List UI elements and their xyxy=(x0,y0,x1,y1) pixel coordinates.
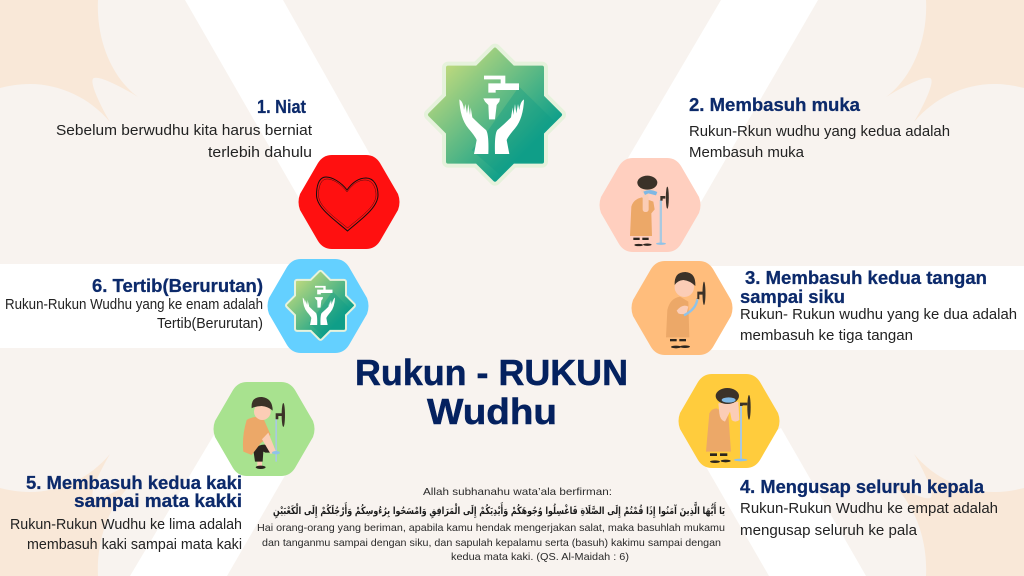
text: membasuh muka: Rukun-Rkun wudhu yang kedua adalah xyxy=(689,124,950,140)
text: tertib: Rukun-Rukun Wudhu yang ke enam adalah xyxy=(5,297,263,313)
text: membasuh tangan: Rukun- Rukun wudhu yang ke dua adalah xyxy=(740,307,1017,323)
heading: membasuh tangan xyxy=(740,268,987,307)
quran verse block xyxy=(257,486,725,563)
text: membasuh muka: Membasuh muka xyxy=(689,145,805,161)
heading: membasuh muka: 2. Membasuh muka xyxy=(689,95,861,115)
text: mengusap kepala: Rukun-Rukun Wudhu ke empat adalah xyxy=(740,501,998,517)
text: membasuh kaki: membasuh kaki sampai mata kaki xyxy=(27,537,242,553)
text: mengusap kepala xyxy=(740,501,998,539)
heading: niat: 1. Niat xyxy=(257,97,306,117)
text: niat xyxy=(56,123,312,161)
heading: membasuh tangan: sampai siku xyxy=(740,287,845,307)
step 2: membasuh muka xyxy=(600,95,950,252)
text: membasuh tangan xyxy=(740,307,1017,344)
icon: pink hexagon washing face xyxy=(600,158,700,252)
heading: membasuh kaki: sampai mata kakki xyxy=(74,491,242,511)
verse translation xyxy=(257,522,725,563)
heading: mengusap kepala: 4. Mengusap seluruh kepala xyxy=(740,477,985,497)
step 3: membasuh tangan xyxy=(632,261,1017,355)
verse translation: Hai orang-orang yang beriman, apabila kamu hendak mengerjakan salat, maka basuhlah mukamu xyxy=(257,522,725,534)
step 6: tertib xyxy=(5,259,368,353)
heading: membasuh kaki: 5. Membasuh kedua kaki xyxy=(26,473,242,493)
icon: orange hexagon washing arms xyxy=(632,261,732,355)
step 1: niat xyxy=(56,97,400,249)
title: Wudhu xyxy=(427,391,557,432)
icon: yellow hexagon wiping head xyxy=(678,374,780,468)
step 4: mengusap kepala xyxy=(678,374,998,539)
step 5: membasuh kaki xyxy=(10,382,314,553)
text: membasuh kaki: Rukun-Rukun Wudhu ke lima adalah xyxy=(10,517,242,533)
heading: tertib: 6. Tertib(Berurutan) xyxy=(92,276,263,296)
icon: blue hexagon with star emblem xyxy=(268,259,368,353)
text: membasuh tangan: membasuh ke tiga tangan xyxy=(740,328,913,344)
verse translation: kedua mata kaki. (QS. Al-Maidah : 6) xyxy=(451,551,629,563)
text: membasuh muka xyxy=(689,124,950,161)
title: Rukun - RUKUN xyxy=(355,352,628,393)
verse translation: dan tanganmu sampai dengan siku, dan sapulah kepalamu serta (basuh) kakimu sampai dengan xyxy=(262,537,721,549)
heading: membasuh tangan: 3. Membasuh kedua tangan xyxy=(745,268,987,288)
icon: green hexagon washing feet xyxy=(214,382,314,476)
icon: wudhu star emblem xyxy=(430,50,567,187)
icon: red hexagon with heart xyxy=(298,155,400,249)
arabic verse: يَا أَيُّهَا الَّذِينَ آمَنُوا إِذَا قُمْتُمْ إِلَى الصَّلَاةِ فَاغْسِلُوا وُجُوهَكُمْ وَأَيْدِيَكُمْ إِلَى الْمَرَافِقِ وَامْسَحُوا بِرُءُوسِكُمْ وَأَرْجُلَكُمْ إِلَى الْكَعْبَيْنِ xyxy=(273,502,725,519)
text: niat: terlebih dahulu xyxy=(208,145,312,161)
text: niat: Sebelum berwudhu kita harus berniat xyxy=(56,123,312,139)
text: mengusap kepala: mengusap seluruh ke pala xyxy=(740,523,918,539)
text: tertib xyxy=(5,297,263,332)
title xyxy=(355,352,628,432)
verse intro: Allah subhanahu wata’ala berfirman: xyxy=(423,486,612,498)
heading: membasuh kaki xyxy=(26,473,242,511)
text: tertib: Tertib(Berurutan) xyxy=(157,316,263,332)
text: membasuh kaki xyxy=(10,517,242,553)
